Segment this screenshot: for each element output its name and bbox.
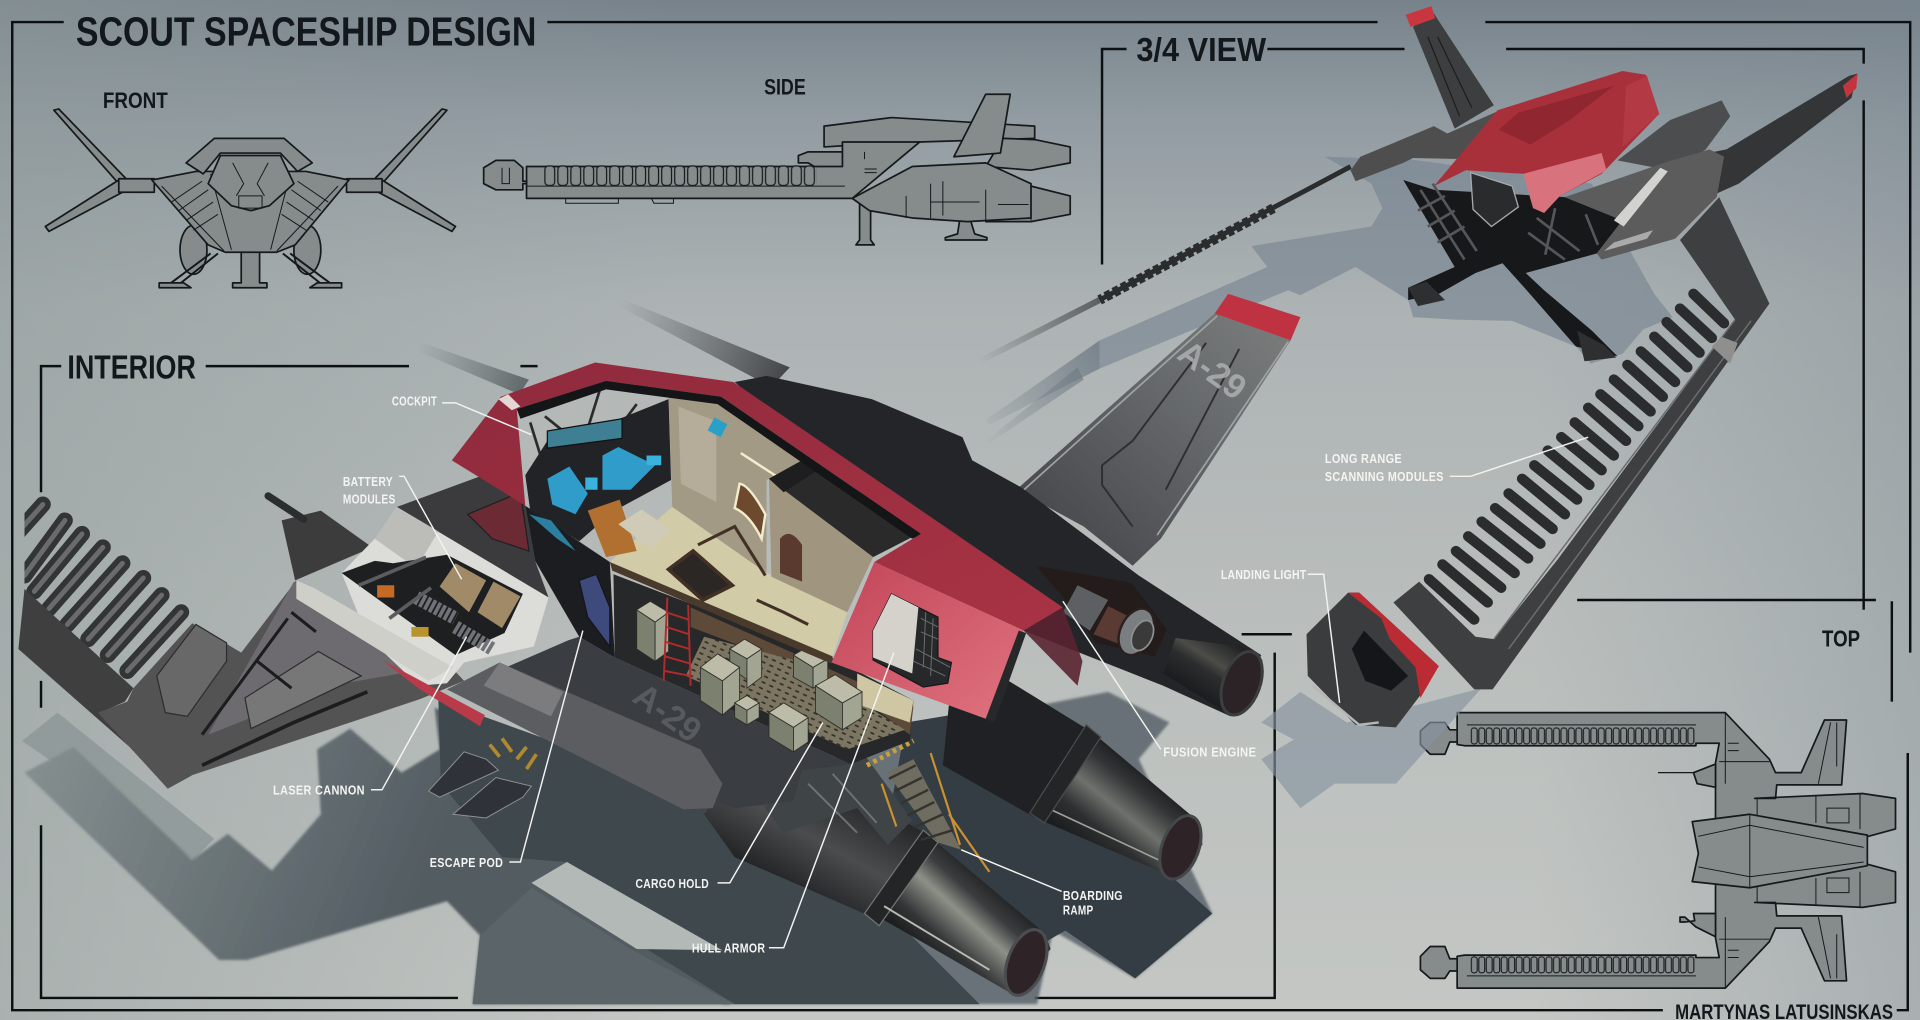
main landing gear (429, 738, 536, 818)
feet (1408, 282, 1616, 361)
cockpit window (517, 381, 669, 478)
cockpit glass (1471, 173, 1518, 227)
gun rod (268, 496, 304, 519)
panel: cargo hold (613, 574, 913, 764)
callout: cargo hold (636, 722, 823, 891)
callout: long range scanning modules (1325, 437, 1588, 484)
shadow: comb end cap (1261, 688, 1482, 808)
callout: landing light (1221, 567, 1340, 703)
lower hull: A-29 (626, 676, 708, 751)
white housing (342, 507, 549, 686)
engine 1 (704, 753, 1055, 1001)
long boom (1100, 167, 1351, 300)
scanning modules, left (12, 504, 181, 671)
red spike (382, 660, 485, 726)
callout: escape pod: ESCAPE POD (430, 855, 503, 870)
near hull panel (831, 562, 1082, 722)
right wing (1565, 149, 1724, 260)
wing base strip (18, 589, 192, 789)
left wing (1351, 110, 1500, 181)
callout: boarding ramp: BOARDING (1063, 888, 1123, 903)
shadow: 3/4 view ship (980, 157, 1673, 443)
underside (1403, 180, 1622, 356)
battery bay (342, 555, 523, 655)
callout: battery modules: BATTERY (343, 474, 393, 489)
tail fin (1406, 6, 1494, 129)
interior frame (41, 366, 1292, 998)
callout: hull armor: HULL ARMOR (692, 941, 766, 956)
callout: laser cannon: LASER CANNON (273, 783, 365, 798)
floor (610, 507, 847, 656)
crates (637, 601, 862, 752)
panel: cabin deck (517, 381, 918, 664)
blueprint: front view (45, 109, 456, 288)
fusion core (1036, 566, 1167, 661)
callout: battery modules (343, 474, 462, 579)
armor window (873, 594, 951, 687)
callout: laser cannon (273, 637, 467, 798)
title: SCOUT SPACESHIP DESIGN (76, 8, 536, 54)
boarding ramp (867, 741, 989, 872)
partition (769, 460, 918, 557)
engine 3 with fusion core (1036, 566, 1270, 721)
callout: boarding ramp: RAMP (1063, 903, 1094, 918)
callout: long range scanning modules: SCANNING MODULES (1325, 469, 1444, 484)
escape pod (579, 574, 610, 647)
right fin (1708, 73, 1858, 193)
bulkhead frame and escape pod (525, 506, 615, 658)
callout: cockpit: COCKPIT (392, 393, 437, 408)
seats and table (588, 500, 637, 557)
rear wall (669, 397, 807, 573)
upper hull (735, 376, 1261, 716)
ladder (664, 598, 691, 686)
shadow: main ship (22, 692, 1212, 1004)
blueprint: top view (1420, 713, 1896, 988)
fin (282, 511, 372, 580)
lower hull (447, 637, 851, 809)
fading ghost shadows behind cabin (413, 300, 790, 394)
heading: side: SIDE (764, 74, 806, 99)
callout: battery modules: MODULES (343, 491, 396, 506)
heading: interior: INTERIOR (67, 349, 196, 386)
heading: top: TOP (1822, 626, 1860, 652)
callout: escape pod (430, 631, 583, 870)
main tail fin (1016, 294, 1300, 566)
red roof (1434, 71, 1659, 213)
arm (1393, 197, 1769, 689)
callout: long range scanning modules: LONG RANGE (1325, 451, 1402, 466)
heading: front: FRONT (103, 88, 168, 113)
callout: fusion engine (1063, 601, 1256, 760)
callout: cockpit (392, 393, 531, 435)
blueprint: side view (484, 94, 1070, 245)
grille panels (1418, 184, 1598, 260)
callout: fusion engine: FUSION ENGINE (1163, 745, 1256, 760)
callout: hull armor (692, 653, 894, 956)
red roof band (452, 362, 1063, 631)
upper panel (397, 476, 549, 598)
heading: 3/4 view: 3/4 VIEW (1136, 32, 1267, 69)
callout: cargo hold: CARGO HOLD (636, 876, 709, 891)
engine 2 (943, 680, 1209, 885)
wing surface (98, 580, 464, 789)
cockpit interior (525, 399, 671, 551)
3/4 view ship (1100, 6, 1858, 727)
main tail fin: A-29 (1171, 333, 1253, 408)
callout: boarding ramp (961, 850, 1123, 918)
right engine (1618, 100, 1730, 171)
callout: landing light: LANDING LIGHT (1221, 567, 1307, 582)
comb teeth (1429, 294, 1724, 620)
end cap (1307, 593, 1439, 727)
left wing (18, 476, 549, 789)
3/4 view frame (1102, 49, 1876, 610)
